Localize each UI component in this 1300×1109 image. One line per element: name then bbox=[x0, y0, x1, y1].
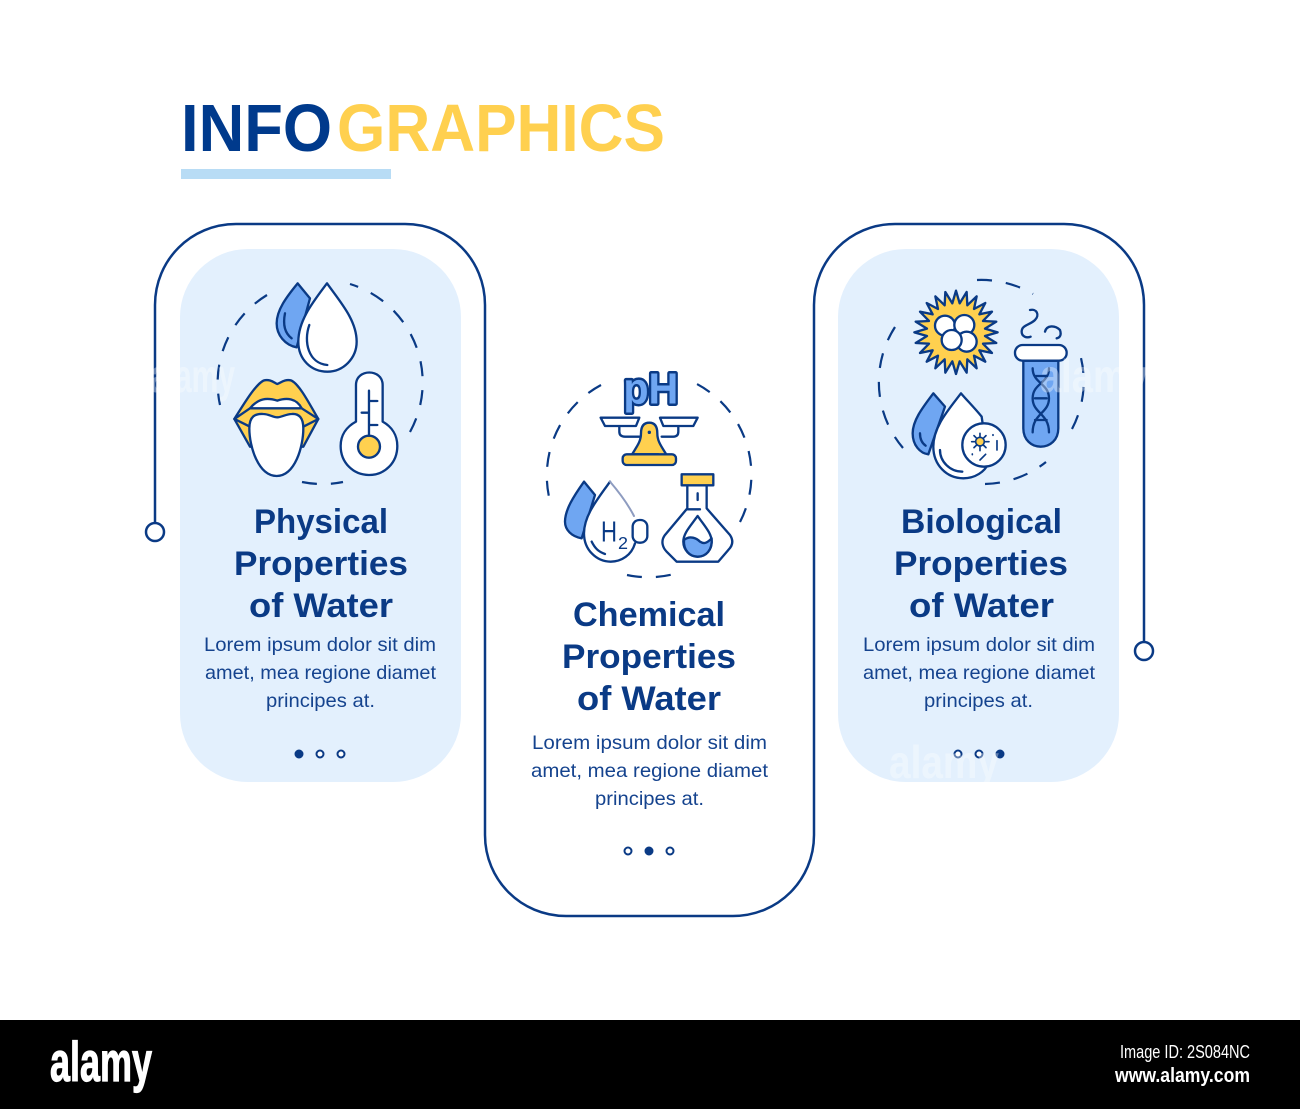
heading: biological bbox=[894, 503, 1068, 625]
heading: physical: Properties bbox=[234, 545, 408, 583]
connecting outline bbox=[155, 224, 1144, 916]
pagination dots: biological bbox=[954, 750, 1004, 758]
heading: physical bbox=[234, 503, 408, 625]
heading: physical: Physical bbox=[254, 503, 388, 541]
body text: chemical: principes at. bbox=[595, 788, 704, 810]
heading: physical: of Water bbox=[249, 587, 393, 625]
body text: chemical: Lorem ipsum dolor sit dim bbox=[532, 732, 767, 754]
title bbox=[181, 91, 665, 166]
footer image id bbox=[1114, 1042, 1250, 1087]
title: INFO bbox=[181, 91, 332, 166]
body text: physical: Lorem ipsum dolor sit dim bbox=[204, 634, 436, 656]
footer bar bbox=[0, 1020, 1300, 1109]
body text: chemical: amet, mea regione diamet bbox=[531, 760, 769, 782]
pagination dots: physical bbox=[296, 750, 344, 758]
icon: chemical properties: H bbox=[601, 517, 617, 549]
outline start node bbox=[146, 523, 164, 541]
heading: chemical: of Water bbox=[577, 680, 721, 718]
body text: chemical bbox=[531, 732, 769, 810]
faint stock watermarks bbox=[150, 350, 1148, 788]
body text: biological: principes at. bbox=[924, 690, 1033, 712]
body text: biological: amet, mea regione diamet bbox=[863, 662, 1096, 684]
heading: chemical: Chemical bbox=[573, 596, 725, 634]
panel: biological background bbox=[838, 249, 1119, 782]
body text: physical: principes at. bbox=[266, 690, 375, 712]
body text: physical bbox=[204, 634, 437, 712]
title underline bbox=[181, 169, 391, 179]
heading: biological: of Water bbox=[909, 587, 1054, 625]
footer image id: Image ID: 2S084NC bbox=[1120, 1042, 1250, 1062]
faint stock watermarks: alamy bbox=[150, 350, 235, 402]
heading: chemical: Properties bbox=[562, 638, 736, 676]
heading: biological: Properties bbox=[894, 545, 1068, 583]
body text: physical: amet, mea regione diamet bbox=[205, 662, 437, 684]
heading: chemical bbox=[562, 596, 736, 718]
icon: physical properties bbox=[218, 283, 423, 484]
faint stock watermarks: alamy bbox=[1040, 350, 1148, 402]
icon: chemical properties: pH bbox=[623, 364, 678, 413]
faint stock watermarks: alamy bbox=[889, 736, 999, 788]
panel: physical background bbox=[180, 249, 461, 782]
pagination dots: chemical bbox=[624, 848, 674, 854]
icon: chemical properties: 2 bbox=[618, 533, 628, 553]
icon: chemical properties bbox=[547, 364, 751, 577]
footer image id: www.alamy.com bbox=[1114, 1065, 1250, 1087]
outline end node bbox=[1135, 642, 1153, 660]
footer logo: alamy bbox=[50, 1030, 152, 1093]
body text: biological: Lorem ipsum dolor sit dim bbox=[863, 634, 1095, 656]
body text: biological bbox=[863, 634, 1096, 712]
heading: biological: Biological bbox=[901, 503, 1062, 541]
icon: biological properties bbox=[879, 280, 1084, 484]
title: GRAPHICS bbox=[337, 91, 665, 166]
